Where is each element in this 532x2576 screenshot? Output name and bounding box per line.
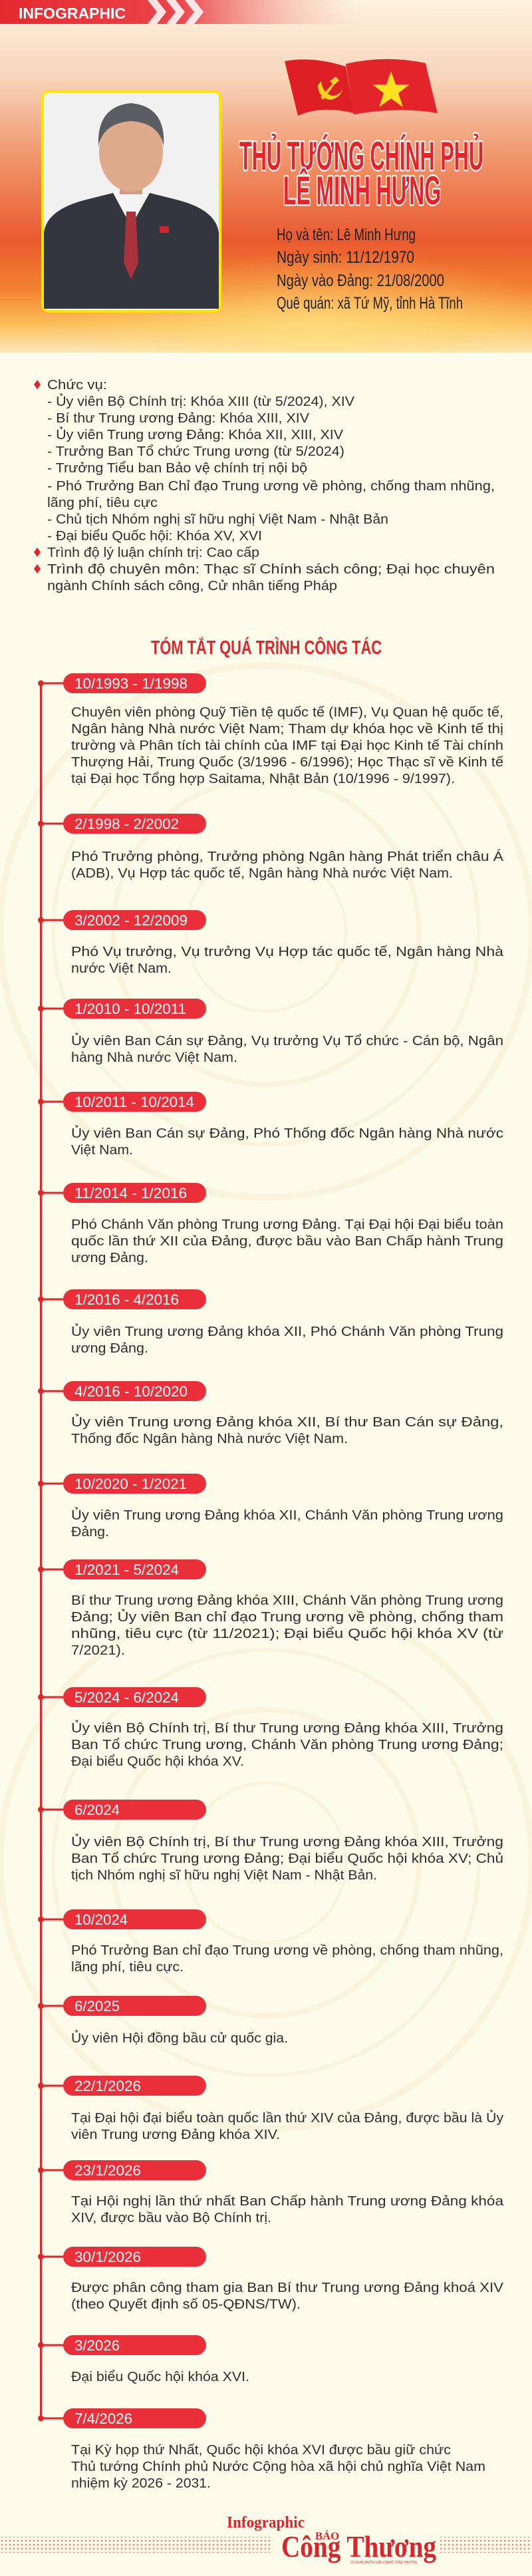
entry: 1/2021 - 5/2024 (38, 1559, 503, 1658)
personal info: Ngày sinh: 11/12/1970 (277, 248, 414, 267)
entry: 6/2025 (38, 1996, 288, 2046)
entry: 7/4/2026: nhiệm kỳ 2026 - 2031. (71, 2476, 211, 2491)
entry: 5/2024 - 6/2024 (38, 1687, 503, 1769)
entry: 5/2024 - 6/2024: Ban Tổ chức Trung ương, Chánh Văn phòng Trung ương Đảng; (71, 1738, 503, 1752)
entry: 11/2014 - 1/2016 (38, 1183, 503, 1265)
footer logo: Công Thương (281, 2529, 436, 2563)
entry: 2/1998 - 2/2002: Phó Trưởng phòng, Trưởng phòng Ngân hàng Phát triển châu Á (71, 849, 504, 864)
entry: 10/2011 - 10/2014 (38, 1092, 503, 1158)
entry: 6/2024 (38, 1800, 503, 1883)
entry: 30/1/2026: 30/1/2026 (74, 2249, 141, 2265)
entry: 10/2011 - 10/2014: Việt Nam. (71, 1143, 133, 1158)
entry: 22/1/2026 (38, 2076, 503, 2142)
entry: 1/2010 - 10/2011 (38, 999, 503, 1065)
entry: 7/4/2026: Thủ tướng Chính phủ Nước Cộng hòa xã hội chủ nghĩa Việt Nam (71, 2460, 485, 2474)
entry: 10/1993 - 1/1998 (38, 673, 503, 786)
section heading: TÓM TẮT QUÁ TRÌNH CÔNG TÁC (151, 636, 382, 659)
entry: 11/2014 - 1/2016: Phó Chánh Văn phòng Trung ương Đảng. Tại Đại hội Đại biểu toàn (71, 1217, 503, 1232)
icon: flags (285, 59, 438, 116)
entry: 3/2026: 3/2026 (74, 2337, 120, 2354)
profile bullet list: - Trưởng Tiểu ban Bảo vệ chính trị nội bộ (47, 461, 307, 476)
profile bullet list: - Trưởng Ban Tổ chức Trung ương (từ 5/2024) (47, 444, 344, 459)
entry: 1/2016 - 4/2016: 1/2016 - 4/2016 (74, 1291, 179, 1308)
profile bullet list: lãng phí, tiêu cực (47, 496, 158, 510)
entry: 6/2025: 6/2025 (74, 1998, 120, 2014)
portrait photo (43, 91, 220, 311)
footer logo: Infographic (227, 2514, 305, 2531)
entry: 2/1998 - 2/2002: (ADB), Vụ Hợp tác quốc tế, Ngân hàng Nhà nước Việt Nam. (71, 866, 453, 881)
entry: 10/2024 (38, 1909, 503, 1975)
entry: 3/2002 - 12/2009 (38, 910, 504, 976)
profile bullet list: ngành Chính sách công, Cử nhân tiếng Pháp (47, 579, 337, 593)
entry: 11/2014 - 1/2016: 11/2014 - 1/2016 (74, 1185, 187, 1202)
entry: 7/4/2026: Tại Kỳ họp thứ Nhất, Quốc hội khóa XVI được bầu giữ chức (71, 2443, 451, 2458)
entry: 10/2020 - 1/2021: Đảng. (71, 1525, 109, 1539)
profile bullet list: Trình độ chuyên môn: Thạc sĩ Chính sách công; Đại học chuyên (47, 562, 495, 577)
profile bullet list: - Ủy viên Bộ Chính trị: Khóa XIII (từ 5/2024), XIV (47, 393, 355, 409)
entry: 1/2010 - 10/2011: hàng Nhà nước Việt Nam. (71, 1050, 237, 1065)
entry: 6/2025: Ủy viên Hội đồng bầu cử quốc gia. (71, 2030, 288, 2046)
entry: 1/2016 - 4/2016: ương Đảng. (71, 1341, 148, 1356)
entry: 1/2021 - 5/2024: 7/2021). (71, 1643, 125, 1658)
entry: 1/2010 - 10/2011: Ủy viên Ban Cán sự Đảng, Vụ trưởng Vụ Tổ chức - Cán bộ, Ngân (71, 1033, 503, 1048)
entry: 10/2020 - 1/2021 (38, 1474, 503, 1539)
entry: 4/2016 - 10/2020: Ủy viên Trung ương Đảng khóa XII, Bí thư Ban Cán sự Đảng, (71, 1414, 503, 1430)
profile bullet list: Trình độ lý luận chính trị: Cao cấp (47, 546, 259, 560)
top banner: INFOGRAPHIC (0, 0, 359, 24)
entry: 2/1998 - 2/2002: 2/1998 - 2/2002 (74, 816, 179, 832)
entry: 10/1993 - 1/1998: 10/1993 - 1/1998 (74, 675, 188, 692)
entry: 1/2021 - 5/2024: Bí thư Trung ương Đảng khóa XIII, Chánh Văn phòng Trung ương (71, 1593, 503, 1608)
profile bullet list: - Đại biểu Quốc hội: Khóa XV, XVI (47, 529, 262, 544)
header background (0, 0, 532, 353)
entry: 7/4/2026: 7/4/2026 (74, 2410, 132, 2427)
entry: 3/2002 - 12/2009: nước Việt Nam. (71, 961, 172, 976)
entry: 10/1993 - 1/1998: tại Đại học Tổng hợp Saitama, Nhật Bản (10/1996 - 9/1997). (71, 772, 455, 786)
entry: 30/1/2026: Được phân công tham gia Ban Bí thư Trung ương Đảng khoá XIV (71, 2281, 504, 2295)
personal info (277, 226, 463, 313)
entry: 22/1/2026: 22/1/2026 (74, 2078, 141, 2094)
entry: 1/2021 - 5/2024: Đảng; Ủy viên Ban chỉ đạo Trung ương về phòng, chống tham (71, 1609, 503, 1625)
footer logo: BÁO (315, 2529, 339, 2542)
entry: 6/2024: Ủy viên Bộ Chính trị, Bí thư Trung ương Đảng khóa XIII, Trưởng (71, 1834, 503, 1850)
entry: 22/1/2026: viên Trung ương Đảng khóa XIV. (71, 2128, 280, 2142)
entry: 6/2024: tịch Nhóm nghị sĩ hữu nghị Việt Nam - Nhật Bản. (71, 1868, 377, 1883)
entry: 1/2016 - 4/2016: Ủy viên Trung ương Đảng khóa XII, Phó Chánh Văn phòng Trung (71, 1323, 503, 1339)
entry: 10/1993 - 1/1998: trường và Phân tích tài chính của IMF tại Đại học Kinh tế Tài chính (71, 738, 503, 753)
entry: 10/2011 - 10/2014: 10/2011 - 10/2014 (74, 1094, 194, 1110)
footer logo: CƠ QUAN NGÔN LUẬN CỦA BỘ CÔNG THƯƠNG (350, 2560, 417, 2565)
personal info: Quê quán: xã Tứ Mỹ, tỉnh Hà Tĩnh (277, 294, 463, 313)
entry: 1/2010 - 10/2011: 1/2010 - 10/2011 (74, 1001, 186, 1017)
entry: 23/1/2026: XIV, được bầu vào Bộ Chính trị. (71, 2211, 271, 2225)
personal info: Họ và tên: Lê Minh Hưng (277, 226, 416, 244)
entry: 11/2014 - 1/2016: quốc lần thứ XII của Đảng, được bầu vào Ban Chấp hành Trung (71, 1234, 503, 1249)
entry: 6/2024: 6/2024 (74, 1802, 120, 1818)
entry: 1/2016 - 4/2016 (38, 1289, 503, 1356)
top banner: INFOGRAPHIC: INFOGRAPHIC (19, 5, 126, 22)
entry: 10/2011 - 10/2014: Ủy viên Ban Cán sự Đảng, Phó Thống đốc Ngân hàng Nhà nước (71, 1125, 503, 1141)
entry: 3/2026 (38, 2335, 249, 2384)
entry: 5/2024 - 6/2024: 5/2024 - 6/2024 (74, 1689, 179, 1706)
profile bullet list: - Bí thư Trung ương Đảng: Khóa XIII, XIV (47, 411, 310, 426)
profile bullet list: - Chủ tịch Nhóm nghị sĩ hữu nghị Việt Nam - Nhật Bản (47, 512, 388, 527)
entry: 3/2002 - 12/2009: 3/2002 - 12/2009 (74, 912, 188, 929)
entry: 1/2021 - 5/2024: 1/2021 - 5/2024 (74, 1561, 179, 1578)
title (239, 134, 483, 213)
entry: 10/1993 - 1/1998: Thượng Hải, Trung Quốc (3/1996 - 6/1996); Học Thạc sĩ về Kinh tế (71, 755, 503, 770)
background drum pattern (0, 665, 532, 2129)
entry: 23/1/2026: 23/1/2026 (74, 2162, 141, 2179)
entry: 10/2024: Phó Trưởng Ban chỉ đạo Trung ương về phòng, chống tham nhũng, (71, 1943, 503, 1958)
timeline (38, 673, 504, 2491)
profile bullet list: Chức vụ: (47, 378, 107, 393)
entry: 10/2020 - 1/2021: 10/2020 - 1/2021 (74, 1476, 187, 1492)
entry: 3/2026: Đại biểu Quốc hội khóa XVI. (71, 2370, 249, 2384)
entry: 5/2024 - 6/2024: Ủy viên Bộ Chính trị, Bí thư Trung ương Đảng khóa XIII, Trưởng (71, 1720, 503, 1736)
entry: 3/2002 - 12/2009: Phó Vụ trưởng, Vụ trưởng Vụ Hợp tác quốc tế, Ngân hàng Nhà (71, 945, 504, 959)
entry: 10/1993 - 1/1998: Chuyên viên phòng Quỹ Tiền tệ quốc tế (IMF), Vụ Quan hệ quốc tế, (71, 705, 503, 720)
entry: 4/2016 - 10/2020 (38, 1381, 503, 1446)
entry: 22/1/2026: Tại Đại hội đại biểu toàn quốc lần thứ XIV của Đảng, được bầu là Ủy (71, 2110, 503, 2126)
entry: 11/2014 - 1/2016: ương Đảng. (71, 1251, 148, 1265)
entry: 30/1/2026 (38, 2247, 504, 2312)
profile bullet list (34, 378, 495, 593)
entry: 4/2016 - 10/2020: 4/2016 - 10/2020 (74, 1383, 188, 1400)
entry: 10/2024: lãng phí, tiêu cực. (71, 1960, 184, 1975)
timeline vertical line (40, 683, 42, 2418)
entry: 30/1/2026: (theo Quyết định số 05-QĐNS/TW). (71, 2297, 301, 2312)
entry: 23/1/2026 (38, 2160, 504, 2225)
footer logo (0, 2514, 532, 2565)
entry: 2/1998 - 2/2002 (38, 814, 504, 881)
entry: 4/2016 - 10/2020: Thống đốc Ngân hàng Nhà nước Việt Nam. (71, 1432, 348, 1446)
profile bullet list: - Phó Trưởng Ban Chỉ đạo Trung ương về phòng, chống tham nhũng, (47, 479, 495, 494)
entry: 10/1993 - 1/1998: Ngân hàng Nhà nước Việt Nam; Tham dự khóa học về Kinh tế thị (71, 722, 503, 736)
entry: 1/2021 - 5/2024: nhũng, tiêu cực (từ 11/2021); Đại biểu Quốc hội khóa XV (từ (71, 1627, 503, 1641)
entry: 10/2020 - 1/2021: Ủy viên Trung ương Đảng khóa XII, Chánh Văn phòng Trung ương (71, 1507, 503, 1523)
entry: 10/2024: 10/2024 (74, 1911, 128, 1928)
entry: 7/4/2026 (38, 2408, 485, 2491)
entry: 5/2024 - 6/2024: Đại biểu Quốc hội khóa XV. (71, 1754, 244, 1769)
entry: 23/1/2026: Tại Hội nghị lần thứ nhất Ban Chấp hành Trung ương Đảng khóa (71, 2194, 504, 2209)
entry: 6/2024: Ban Tổ chức Trung ương Đảng; Đại biểu Quốc hội khóa XV; Chủ (71, 1852, 503, 1866)
profile bullet list: - Ủy viên Trung ương Đảng: Khóa XII, XIII, XIV (47, 426, 344, 442)
personal info: Ngày vào Đảng: 21/08/2000 (277, 271, 444, 290)
